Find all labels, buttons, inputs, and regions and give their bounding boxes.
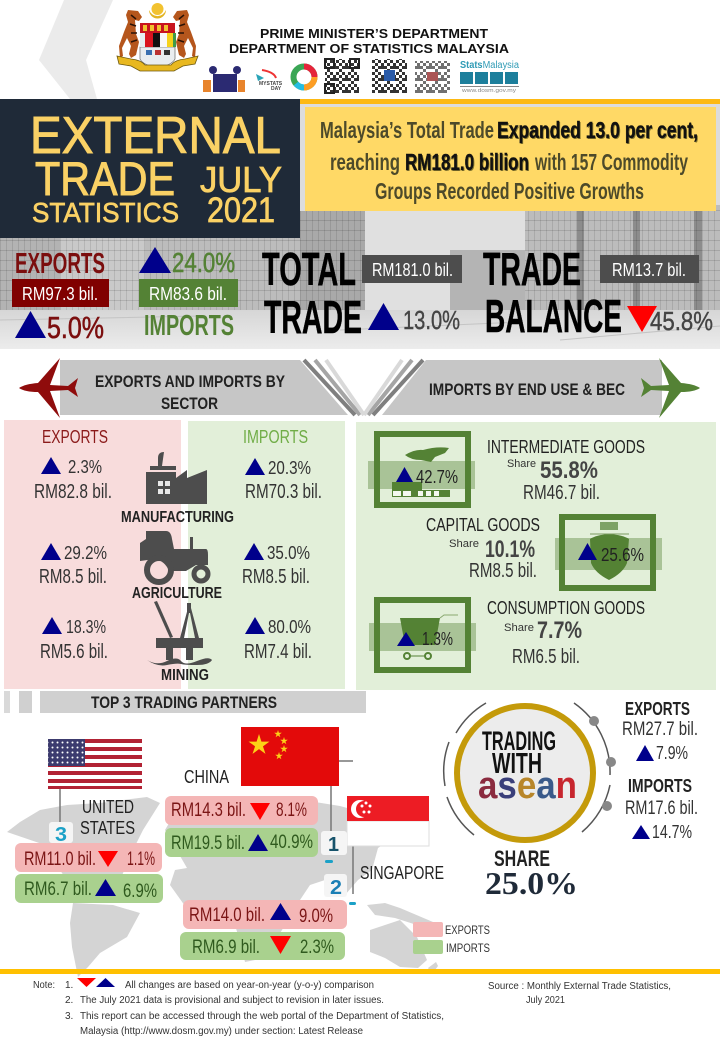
- icon: StatsMalaysia social: StatsMalaysia: [460, 60, 519, 71]
- mining exports: [40, 617, 108, 663]
- source: Source : Monthly External Trade Statistics,: [488, 981, 671, 992]
- icon: mystats day logo: MYSTATS: [259, 81, 283, 87]
- trade balance summary: RM13.7 bil.: [612, 260, 686, 280]
- mining imports: 80.0%: [268, 617, 311, 637]
- ASEAN exports: EXPORTS: [625, 699, 690, 719]
- source: [488, 981, 671, 1006]
- agriculture imports: [242, 543, 310, 588]
- country names: [80, 767, 444, 883]
- China trade figures: [165, 796, 318, 857]
- headline callout: RM181.0 billion: [406, 150, 530, 176]
- label: manufacturing: MANUFACTURING: [121, 509, 234, 526]
- ASEAN imports: RM17.6 bil.: [625, 798, 698, 819]
- capital goods icon box: 25.6%: [601, 545, 644, 565]
- icon: oil rig: [147, 601, 212, 665]
- capital goods text: 10.1%: [485, 536, 535, 563]
- ASEAN exports: [622, 699, 698, 763]
- icon: census logo: [203, 66, 245, 92]
- imports summary: RM83.6 bil.: [149, 284, 227, 304]
- title panel: EXTERNAL: [30, 107, 281, 165]
- legend: [413, 922, 490, 955]
- agriculture exports: RM8.5 bil.: [39, 566, 107, 588]
- China trade figures: RM19.5 bil.: [171, 833, 245, 854]
- manufacturing exports: [34, 457, 112, 503]
- flag: Singapore: [347, 796, 429, 846]
- section banner: exports and imports by sector: [60, 360, 364, 415]
- exports summary: EXPORTS: [15, 248, 105, 280]
- Singapore trade figures: RM14.0 bil.: [189, 905, 265, 926]
- intermediate goods text: RM46.7 bil.: [523, 482, 600, 504]
- total trade summary: TOTAL: [262, 243, 356, 295]
- mining exports: RM5.6 bil.: [40, 641, 108, 663]
- icon: QR code 2: [372, 59, 407, 93]
- agriculture imports: RM8.5 bil.: [242, 566, 310, 588]
- imports summary: [139, 247, 238, 342]
- notes: This report can be accessed through the web portal of the Department of Statistics,: [80, 1011, 444, 1022]
- header title: [229, 26, 510, 56]
- rank badges: [49, 822, 356, 905]
- flag: China: [241, 727, 339, 786]
- icon: QR code 3: [415, 61, 450, 93]
- manufacturing exports: 2.3%: [68, 457, 102, 477]
- total trade summary: TRADE: [264, 291, 362, 343]
- capital goods text: Share: [449, 538, 479, 550]
- intermediate goods text: Share: [507, 458, 536, 470]
- intermediate goods text: INTERMEDIATE GOODS: [487, 437, 645, 457]
- total trade summary: 13.0%: [403, 305, 460, 335]
- section banner: exports and imports by sector: EXPORTS AND IMPORTS BY: [95, 372, 286, 391]
- United States trade figures: [15, 843, 163, 903]
- notes: Note:: [33, 980, 55, 991]
- heading: top 3 trading partners: [4, 691, 366, 713]
- United States trade figures: 1.1%: [127, 849, 155, 870]
- consumption goods text: CONSUMPTION GOODS: [487, 598, 645, 618]
- photo background: container port: [0, 104, 720, 349]
- title panel: [0, 99, 300, 238]
- ASEAN share: [485, 846, 578, 901]
- ASEAN share: 25.0%: [485, 865, 578, 901]
- exports summary: RM97.3 bil.: [22, 284, 98, 304]
- icon: StatsMalaysia social: www.dosm.gov.my: [461, 88, 516, 94]
- logo row: [203, 59, 519, 94]
- notes: 1.: [65, 980, 73, 991]
- capital goods text: CAPITAL GOODS: [426, 515, 540, 535]
- trade balance summary: TRADE: [483, 243, 581, 295]
- panel: imports by sector: [188, 421, 345, 689]
- imports summary: 24.0%: [172, 247, 235, 278]
- exports summary: [12, 248, 109, 345]
- capital goods text: RM8.5 bil.: [469, 560, 537, 582]
- manufacturing imports: 20.3%: [268, 458, 311, 478]
- sector icons and labels: [121, 452, 234, 684]
- flag: United States: [48, 739, 142, 789]
- title panel: STATISTICS: [32, 197, 179, 228]
- world map: [7, 797, 438, 977]
- ASEAN badge: [444, 703, 616, 840]
- notes: The July 2021 data is provisional and subject to revision in later issues.: [80, 995, 384, 1006]
- country names: CHINA: [184, 767, 229, 787]
- notes: Malaysia (http://www.dosm.gov.my) under section: Latest Release: [80, 1026, 363, 1037]
- headline callout: Malaysia’s Total Trade: [320, 117, 494, 143]
- manufacturing imports: [245, 458, 322, 503]
- agriculture exports: 29.2%: [64, 543, 107, 563]
- rank 1: [321, 831, 347, 856]
- section banner: imports by end use: IMPORTS BY END USE & BEC: [429, 380, 625, 399]
- notes: 2.: [65, 995, 73, 1006]
- capital goods text: [426, 515, 540, 582]
- rank 3: [49, 822, 73, 846]
- notes: [33, 978, 444, 1037]
- section banner: imports by end use: [364, 360, 662, 415]
- icon: mystats day logo: [252, 60, 283, 92]
- heading: top 3 trading partners: TOP 3 TRADING PARTNERS: [91, 693, 277, 712]
- consumption goods text: Share: [504, 622, 534, 634]
- icon: green plane: [641, 358, 700, 418]
- icon: QR code 1: [325, 59, 359, 93]
- accent bar bottom: [0, 969, 720, 974]
- total trade summary: [262, 243, 462, 343]
- consumption goods icon box: [369, 600, 476, 670]
- header title: PRIME MINISTER’S DEPARTMENT: [260, 26, 488, 41]
- country names: STATES: [80, 818, 135, 838]
- icon: red plane: [19, 358, 78, 418]
- mining imports: RM7.4 bil.: [244, 641, 312, 663]
- Singapore trade figures: 9.0%: [299, 906, 333, 927]
- imports summary: IMPORTS: [144, 310, 234, 342]
- trade balance summary: [483, 243, 713, 342]
- panel: exports by sector: EXPORTS: [42, 427, 108, 447]
- icon: mystats day logo: DAY: [271, 86, 282, 92]
- consumption goods text: [487, 598, 645, 668]
- intermediate goods text: [487, 437, 645, 504]
- connector lines: [60, 761, 353, 894]
- rank 2: [324, 874, 347, 899]
- ASEAN exports: RM27.7 bil.: [622, 719, 698, 740]
- notes: 3.: [65, 1011, 73, 1022]
- government crest: [117, 3, 198, 71]
- exports summary: 5.0%: [47, 310, 104, 345]
- China trade figures: RM14.3 bil.: [171, 800, 246, 821]
- ASEAN imports: [625, 776, 698, 842]
- icon: StatsMalaysia social: [460, 60, 519, 94]
- icon: SDG wheel: [294, 66, 314, 88]
- rank 3: 3: [55, 824, 67, 846]
- header title: DEPARTMENT OF STATISTICS MALAYSIA: [229, 41, 510, 56]
- icon: factory: [146, 452, 207, 504]
- China trade figures: 40.9%: [270, 832, 313, 853]
- consumption goods text: RM6.5 bil.: [512, 646, 580, 668]
- label: agriculture: AGRICULTURE: [132, 585, 222, 602]
- ASEAN imports: 14.7%: [652, 822, 692, 842]
- panel: imports by sector: IMPORTS: [243, 427, 308, 447]
- headline callout: [305, 107, 716, 211]
- ASEAN imports: IMPORTS: [628, 776, 692, 796]
- headline callout: reaching: [330, 149, 400, 175]
- United States trade figures: RM6.7 bil.: [24, 879, 92, 900]
- Singapore trade figures: [180, 900, 347, 960]
- agriculture imports: 35.0%: [267, 543, 310, 563]
- label: mining: MINING: [161, 667, 209, 684]
- icon: tractor: [140, 531, 208, 582]
- decorative header chevron: [39, 0, 113, 99]
- ASEAN exports: 7.9%: [656, 743, 688, 763]
- manufacturing imports: RM70.3 bil.: [245, 481, 322, 503]
- panel: exports by sector: [4, 420, 181, 689]
- country names: SINGAPORE: [360, 863, 444, 883]
- ASEAN badge: asean: [478, 765, 577, 807]
- intermediate goods icon box: [368, 434, 475, 505]
- source: July 2021: [526, 995, 565, 1006]
- title panel: 2021: [207, 191, 275, 230]
- panel: imports by end use: [356, 422, 716, 690]
- ASEAN share: SHARE: [494, 846, 550, 871]
- United States trade figures: 6.9%: [123, 881, 157, 902]
- intermediate goods text: 55.8%: [540, 457, 598, 484]
- trade balance summary: BALANCE: [485, 290, 622, 342]
- rank 2: 2: [330, 877, 342, 899]
- intermediate goods icon box: 42.7%: [416, 467, 458, 487]
- total trade summary: RM181.0 bil.: [372, 260, 453, 280]
- legend: IMPORTS: [446, 941, 490, 955]
- title panel: TRADE: [35, 152, 175, 205]
- title panel: JULY: [200, 159, 282, 200]
- Singapore trade figures: RM6.9 bil.: [192, 937, 260, 958]
- mining imports: [244, 617, 312, 663]
- legend: EXPORTS: [445, 923, 490, 937]
- section banner: exports and imports by sector: SECTOR: [161, 394, 218, 413]
- China trade figures: 8.1%: [276, 800, 307, 821]
- ASEAN badge: TRADING: [482, 726, 556, 756]
- consumption goods icon box: 1.3%: [422, 629, 453, 649]
- rank 1: 1: [328, 834, 339, 856]
- accent bar top: [300, 99, 720, 104]
- headline callout: RM181.0 billion: [405, 149, 529, 175]
- consumption goods text: 7.7%: [537, 617, 582, 644]
- agriculture exports: [39, 543, 107, 588]
- white band between sections: [0, 349, 720, 420]
- United States trade figures: RM11.0 bil.: [24, 849, 96, 870]
- mining exports: 18.3%: [66, 617, 106, 637]
- capital goods icon box: [555, 517, 662, 588]
- ASEAN badge: WITH: [492, 748, 542, 780]
- manufacturing exports: RM82.8 bil.: [34, 481, 112, 503]
- Singapore trade figures: 2.3%: [300, 937, 334, 958]
- notes: All changes are based on year-on-year (y-o-y) comparison: [125, 980, 374, 991]
- country names: UNITED: [82, 797, 134, 817]
